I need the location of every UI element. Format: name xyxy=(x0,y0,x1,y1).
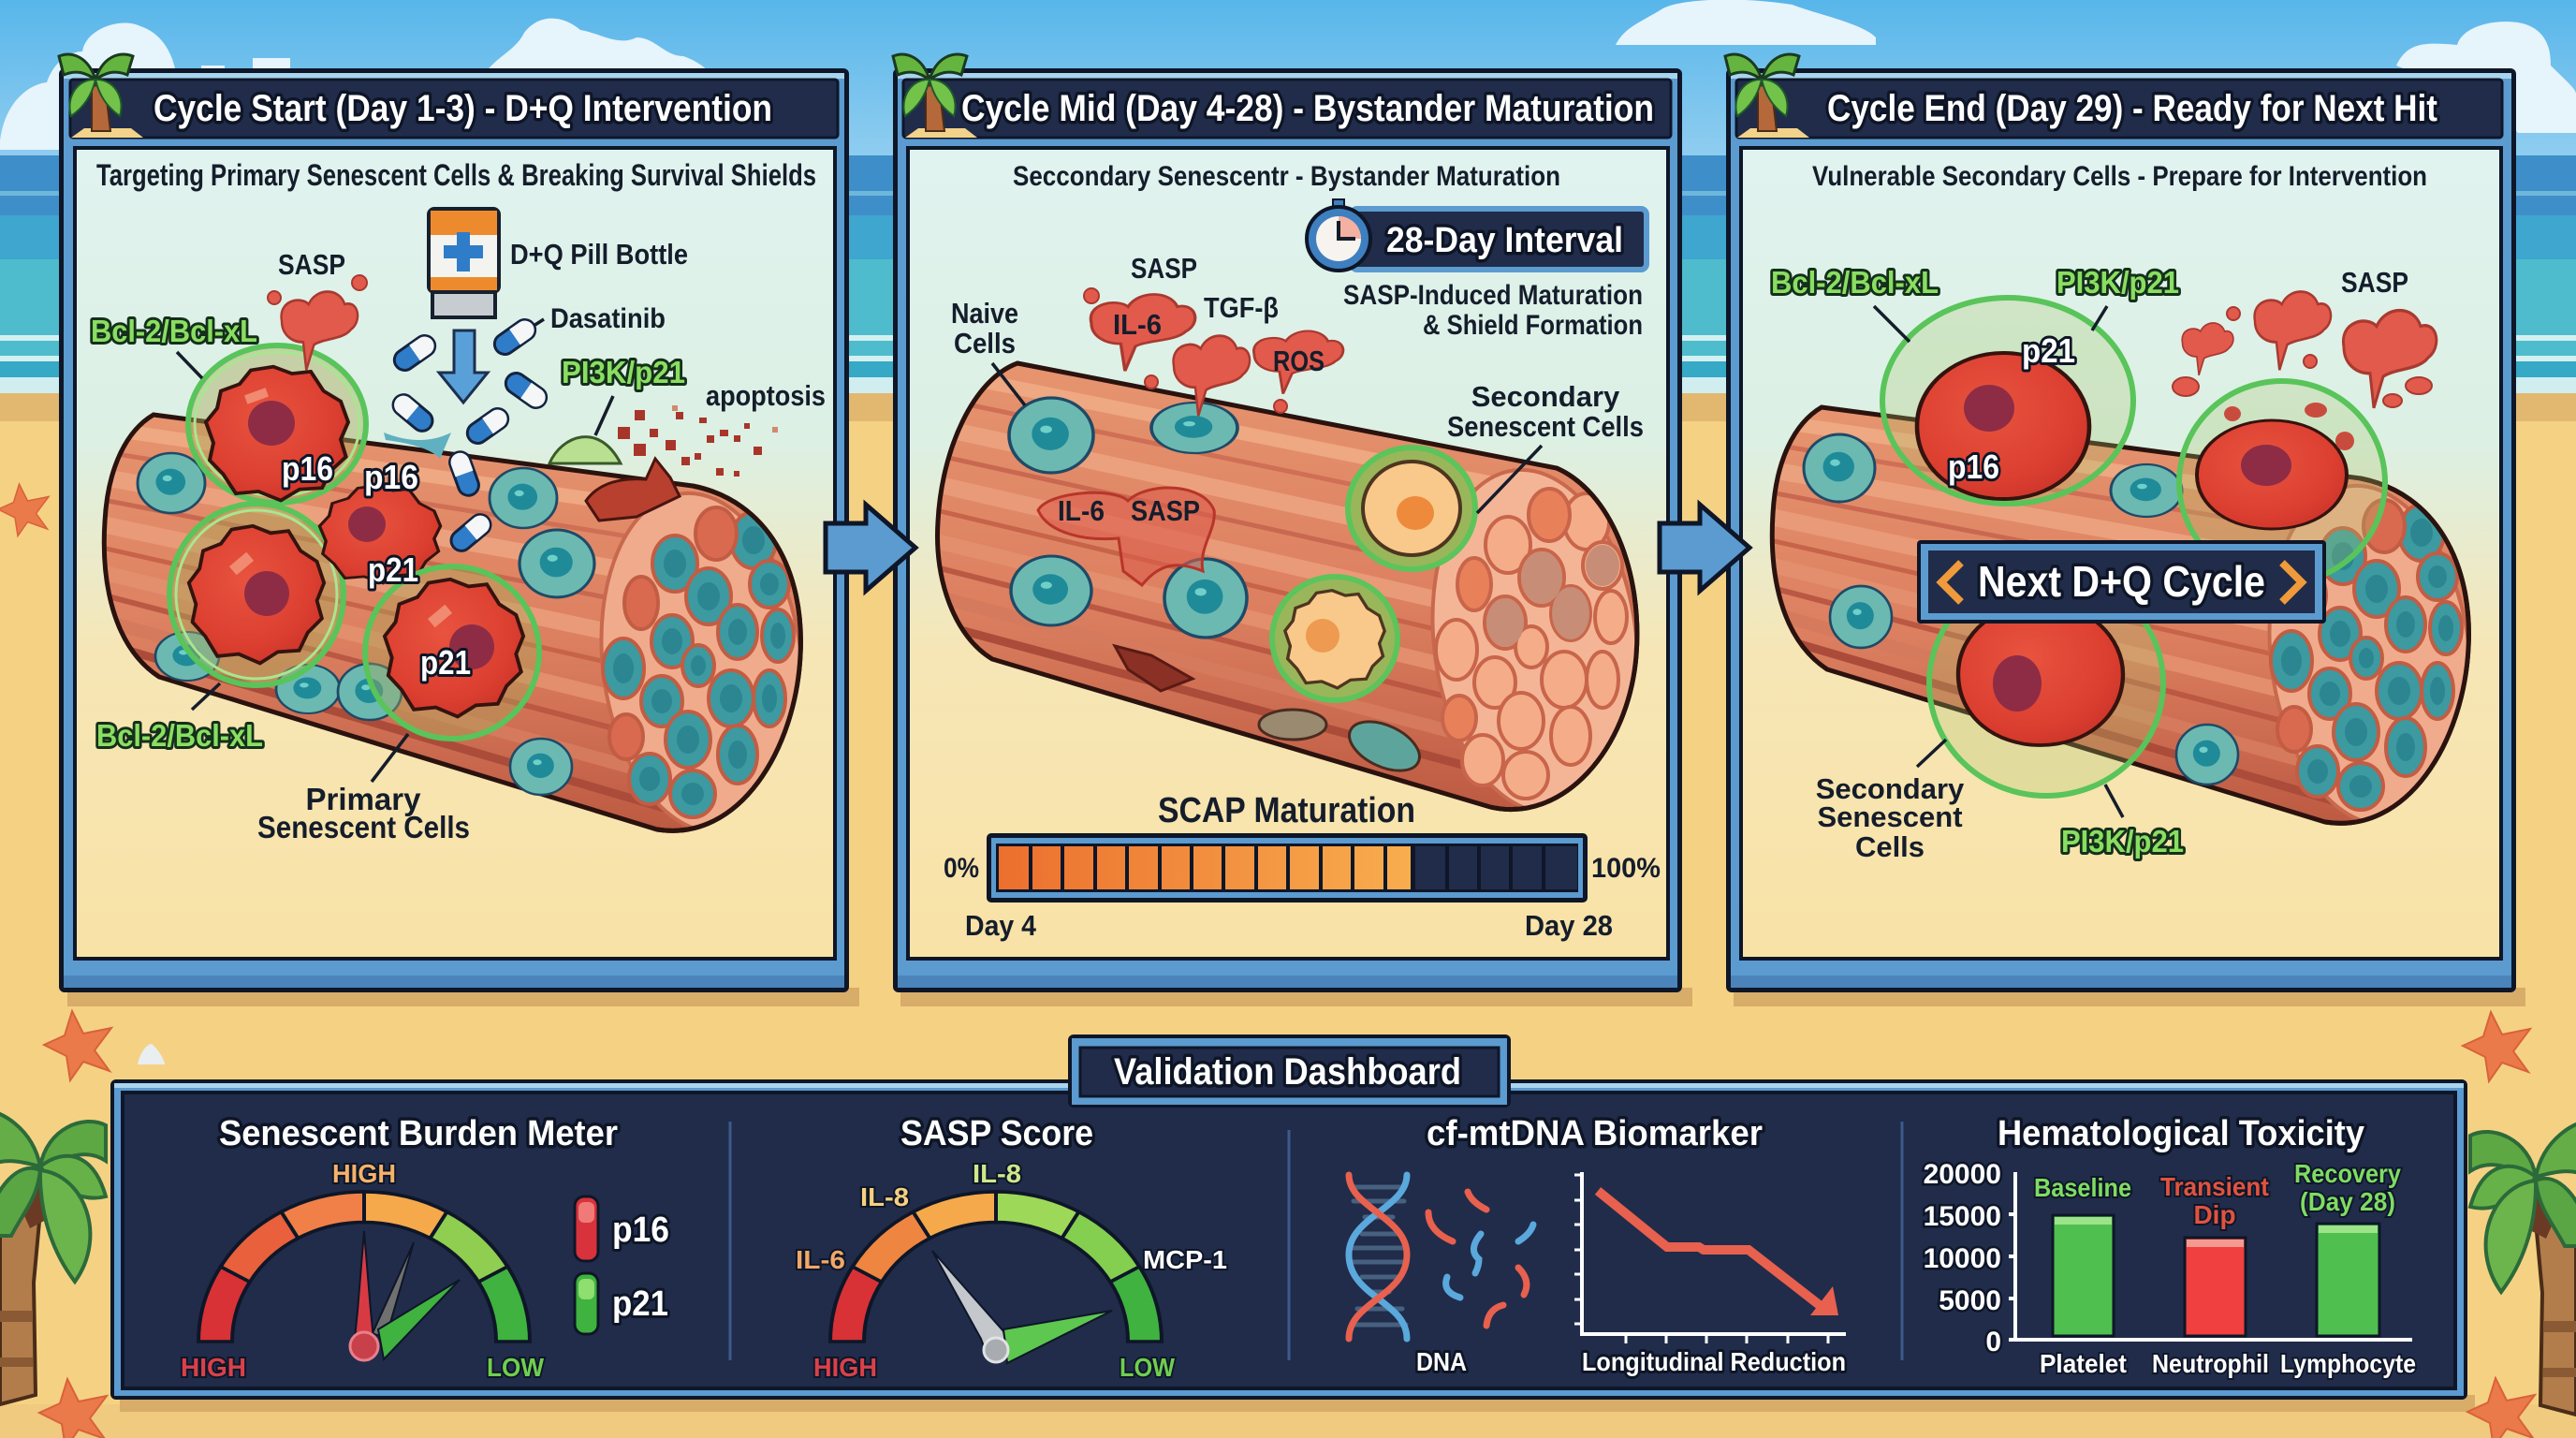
heading: hematological toxicity: Hematological Toxicity xyxy=(1998,1114,2364,1153)
label: secondary senescent cells xyxy=(1447,380,1644,513)
decoration: shell xyxy=(138,1044,165,1064)
label: PI3K bottom xyxy=(2061,785,2184,858)
heading tab: validation dashboard: Validation Dashboard xyxy=(1114,1051,1461,1093)
damaged cell remnants xyxy=(1259,710,1427,781)
progress bar xyxy=(987,833,1588,902)
label: apoptosis: apoptosis xyxy=(706,379,826,412)
muscle fibre cylinder xyxy=(94,415,821,844)
bar: lymphocyte xyxy=(2317,1224,2379,1336)
heading: SASP score: SASP Score xyxy=(900,1114,1093,1153)
teal naive cells xyxy=(1804,434,2238,785)
label: Bcl-2 top xyxy=(91,314,257,378)
labels: cytokines in clouds xyxy=(1113,308,1325,377)
label: naive cells xyxy=(951,297,1025,405)
panel shadows xyxy=(67,988,2525,1412)
decoration: left palm xyxy=(0,1109,106,1404)
callout: next D+Q cycle xyxy=(1917,540,2326,624)
text: SASP-induced maturation: SASP-Induced Maturation xyxy=(1343,280,1643,311)
labels: bar scale: Day 28 xyxy=(1525,909,1613,942)
secondary cell upper right with shield xyxy=(2179,381,2385,583)
label: secondary senescent cells xyxy=(1816,740,1965,863)
panel: cycle mid xyxy=(893,54,1682,992)
icon: palm xyxy=(893,54,977,138)
bar annotations: Transient xyxy=(2160,1172,2269,1201)
labels: p16 p21 markers xyxy=(282,449,471,682)
arrow: start to mid xyxy=(826,505,915,591)
section dividers xyxy=(730,1122,1902,1360)
icon: SASP cloud xyxy=(268,275,367,370)
labels: p16 p21 markers: p16 xyxy=(282,449,333,488)
label: primary senescent cells: Primary xyxy=(306,782,421,816)
gauge: senescent burden xyxy=(198,1192,530,1342)
text: SASP-induced maturation: & Shield Formation xyxy=(1423,310,1643,341)
label: primary senescent cells: Senescent Cells xyxy=(257,810,470,844)
axis labels: 10000 xyxy=(1924,1243,2001,1274)
decoration: starfish xyxy=(0,484,2535,1438)
category labels: Lymphocyte xyxy=(2280,1349,2416,1378)
axis labels: 5000 xyxy=(1939,1285,2001,1316)
label: SASP: SASP xyxy=(1131,252,1197,285)
category labels: Neutrophil xyxy=(2152,1349,2269,1378)
SASP spread on fibre: SASP xyxy=(1131,494,1200,527)
bar annotations: (Day 28) xyxy=(2300,1187,2395,1216)
labels: bar scale: 0% xyxy=(944,853,979,884)
icon: pill bottle xyxy=(429,209,499,317)
naive teal cells xyxy=(1009,398,1247,638)
label: naive cells: Cells xyxy=(954,327,1016,360)
primary senescent cell right with shield xyxy=(365,566,539,739)
labels: p21 p16 xyxy=(1948,331,2075,486)
legend: p16 p21 xyxy=(575,1196,669,1334)
label: secondary senescent cells: Senescent Cells xyxy=(1447,410,1644,443)
category labels xyxy=(2040,1349,2416,1378)
icon: drug pills xyxy=(389,315,550,555)
subtitle: vulnerable: Vulnerable Secondary Cells - Prepare for Intervention xyxy=(1812,161,2427,192)
subtitle: targeting: Targeting Primary Senescent Cells & Breaking Survival Shields xyxy=(96,158,816,192)
panel: cycle start xyxy=(59,54,849,992)
secondary cell lower with shield xyxy=(1929,571,2163,796)
gauge: SASP score xyxy=(830,1192,1162,1342)
label: SCAP maturation: SCAP Maturation xyxy=(1158,791,1415,830)
bar: platelet xyxy=(2053,1215,2114,1336)
heading tab: validation dashboard xyxy=(1068,1034,1511,1108)
apoptosis cell remains xyxy=(549,437,680,521)
arrow: mid to end xyxy=(1660,505,1749,591)
label: secondary senescent cells: Secondary xyxy=(1471,380,1620,413)
labels: cytokines in clouds: IL-6 xyxy=(1113,308,1162,341)
muscle fibre cylinder xyxy=(936,363,1657,825)
heading: cf-mtDNA: cf-mtDNA Biomarker xyxy=(1427,1114,1763,1153)
membrane tear streaks xyxy=(384,433,451,459)
bar: neutrophil xyxy=(2185,1238,2246,1336)
labels: SASP gauge: MCP-1 xyxy=(1143,1245,1227,1274)
label: SASP: SASP xyxy=(278,248,345,281)
SASP spread on fibre: IL-6 xyxy=(1058,494,1105,527)
axis labels: 0 xyxy=(1985,1327,2001,1357)
labels: bar scale: 100% xyxy=(1591,853,1661,884)
labels: cf-mtDNA: DNA xyxy=(1416,1347,1467,1376)
labels: SASP gauge: IL-8 xyxy=(973,1159,1021,1188)
primary senescent cell top with shield xyxy=(188,345,366,503)
labels: SASP gauge: HIGH xyxy=(813,1353,877,1382)
secondary senescent cell upper xyxy=(1348,448,1475,569)
label: Bcl-2 bottom xyxy=(96,683,263,753)
label: SASP: SASP xyxy=(2341,266,2408,299)
axis labels xyxy=(1924,1159,2001,1357)
heading: cycle end: Cycle End (Day 29) - Ready for Next Hit xyxy=(1827,88,2437,129)
labels: burden gauge xyxy=(181,1159,545,1382)
SASP clouds xyxy=(1084,288,1343,416)
label: dasatinib: Dasatinib xyxy=(550,303,666,334)
arrow: drug delivery xyxy=(439,330,488,403)
labels: burden gauge: HIGH xyxy=(332,1159,396,1188)
heading: cycle start: Cycle Start (Day 1-3) - D+Q Intervention xyxy=(154,88,772,129)
label: Bcl-2 xyxy=(1771,265,1939,342)
labels: p16 p21 markers: p21 xyxy=(368,550,418,589)
subtitle: secondary: Seccondary Senescentr - Bystander Maturation xyxy=(1013,161,1560,192)
icon: DNA fragments xyxy=(1428,1192,1533,1326)
bar annotations: Recovery xyxy=(2294,1159,2401,1188)
labels: p16 p21 markers: p16 xyxy=(364,458,418,496)
teal naive cells xyxy=(138,453,594,795)
labels: SASP gauge: IL-8 xyxy=(860,1182,909,1211)
chart: cf-mtDNA longitudinal reduction xyxy=(1574,1172,1846,1343)
axis labels: 15000 xyxy=(1924,1201,2001,1232)
primary senescent cell left with shield xyxy=(169,504,344,685)
category labels: Platelet xyxy=(2040,1349,2127,1378)
label: TGF-beta: TGF-β xyxy=(1204,291,1279,324)
labels: cytokines in clouds: ROS xyxy=(1273,345,1325,377)
icon: palm xyxy=(59,54,143,138)
SASP spread on fibre xyxy=(1038,488,1214,585)
label: PI3K top: PI3K/p21 xyxy=(2056,265,2179,300)
label: secondary senescent cells: Secondary xyxy=(1816,772,1965,805)
labels: SASP gauge: LOW xyxy=(1120,1353,1176,1382)
legend: p16 p21: p16 xyxy=(612,1211,669,1250)
timer: 28-day interval xyxy=(1307,199,1647,271)
labels: SASP gauge xyxy=(796,1159,1227,1382)
primary senescent cell middle xyxy=(319,486,441,583)
label: PI3K: PI3K/p21 xyxy=(562,355,685,389)
decoration: right palm xyxy=(2470,1120,2576,1415)
axis labels: 20000 xyxy=(1924,1159,2001,1190)
bar chart: hematological toxicity xyxy=(1924,1159,2416,1378)
panel: validation dashboard xyxy=(110,1034,2467,1400)
label: PI3K xyxy=(562,355,685,435)
labels: cf-mtDNA xyxy=(1416,1347,1846,1376)
secondary senescent cell lower xyxy=(1272,577,1398,700)
chart axes xyxy=(2009,1172,2412,1340)
timer: 28-day interval: 28-Day Interval xyxy=(1386,221,1623,260)
labels: bar scale: Day 4 xyxy=(965,909,1037,942)
label: secondary senescent cells: Senescent xyxy=(1817,800,1963,833)
label: PI3K top xyxy=(2056,265,2179,330)
legend: p16 p21: p21 xyxy=(612,1284,668,1324)
label: Bcl-2: Bcl-2/Bcl-xL xyxy=(1771,265,1939,300)
label: Bcl-2 top: Bcl-2/Bcl-xL xyxy=(91,314,257,348)
panel: cycle end xyxy=(1725,54,2516,992)
labels: burden gauge: LOW xyxy=(487,1353,545,1382)
labels: p21 p16: p16 xyxy=(1948,448,1999,486)
SASP clouds xyxy=(2173,292,2437,450)
callout: next D+Q cycle: Next D+Q Cycle xyxy=(1978,557,2265,606)
label: primary senescent cells xyxy=(257,734,470,844)
label: pill bottle: D+Q Pill Bottle xyxy=(510,238,688,271)
heading: cycle mid: Cycle Mid (Day 4-28) - Bystander Maturation xyxy=(961,88,1654,129)
text: SASP-induced maturation xyxy=(1343,280,1643,341)
bar annotations: Dip xyxy=(2193,1200,2236,1229)
wound on fibre xyxy=(1115,646,1193,691)
label: Bcl-2 bottom: Bcl-2/Bcl-xL xyxy=(96,718,263,753)
labels: bar scale xyxy=(944,853,1661,942)
labels: cf-mtDNA: Longitudinal Reduction xyxy=(1582,1347,1846,1376)
gauge needles: SASP xyxy=(932,1251,1112,1363)
apoptosis debris xyxy=(618,405,778,477)
label: secondary senescent cells: Cells xyxy=(1855,830,1925,863)
heading: senescent burden meter: Senescent Burden Meter xyxy=(219,1114,618,1153)
gauge needles: burden xyxy=(350,1231,460,1360)
labels: SASP gauge: IL-6 xyxy=(796,1245,845,1274)
icon: palm xyxy=(1725,54,1809,138)
label: naive cells: Naive xyxy=(951,297,1018,330)
muscle fibre cylinder xyxy=(1762,407,2489,837)
secondary cell upper left with shield xyxy=(1882,298,2133,504)
bar annotations: Baseline xyxy=(2034,1173,2131,1202)
labels: p21 p16: p21 xyxy=(2022,331,2075,370)
bar annotations xyxy=(2034,1159,2401,1229)
label: PI3K bottom: PI3K/p21 xyxy=(2061,824,2184,858)
labels: p16 p21 markers: p21 xyxy=(420,643,471,682)
labels: burden gauge: HIGH xyxy=(181,1353,246,1382)
clouds xyxy=(0,0,2576,150)
icon: DNA helix xyxy=(1349,1175,1407,1339)
